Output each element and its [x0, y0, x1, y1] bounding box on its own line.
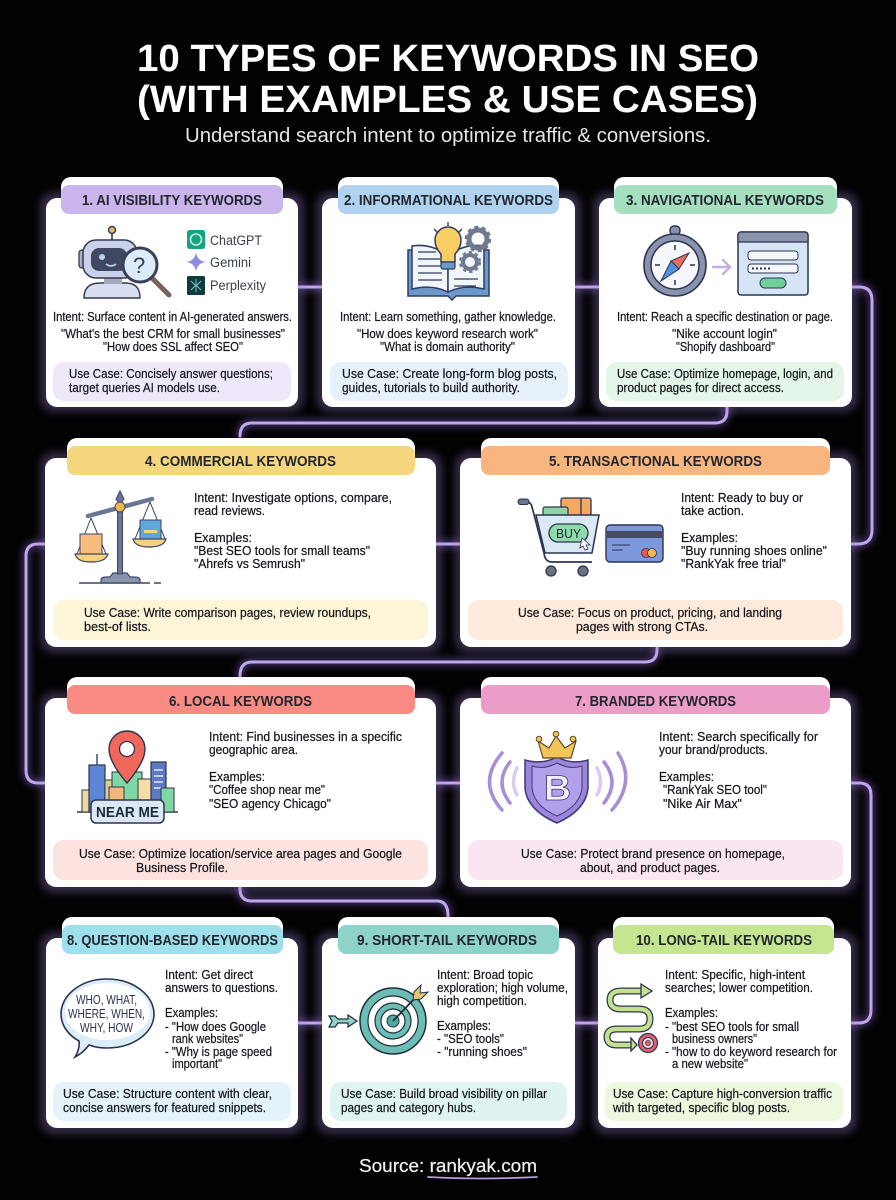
panel: 2. informational keywords	[316, 177, 581, 412]
use case: card 4	[53, 600, 428, 640]
heading: card 3	[614, 185, 837, 214]
use case: card 4: Use Case: Write comparison pages, review roundups,	[84, 606, 371, 620]
connectors between cards	[26, 287, 872, 1023]
icon: speech bubble: WHY, HOW	[80, 1021, 133, 1035]
intent and examples: card 3	[617, 310, 833, 354]
use case: card 2: Use Case: Create long-form blog posts,	[342, 367, 557, 381]
use case: card 1: Use Case: Concisely answer questions;	[69, 367, 273, 381]
panel: 9. short-tail keywords	[316, 917, 581, 1134]
intent and examples: card 2	[340, 310, 556, 354]
intent and examples: card 10	[665, 968, 837, 1071]
icon: Gemini logo	[186, 252, 206, 272]
panel: 6. local keywords	[40, 677, 442, 893]
panel: 5. transactional keywords	[455, 438, 857, 653]
intent and examples: card 3: "Nike account login"	[672, 327, 777, 341]
intent and examples: card 10: a new website"	[672, 1057, 748, 1071]
intent and examples: card 1: "What's the best CRM for small businesses"	[61, 327, 285, 341]
panel: 4. commercial keywords	[40, 438, 442, 653]
heading: card 1: 1. AI VISIBILITY KEYWORDS	[82, 193, 262, 209]
heading: card 8: 8. QUESTION-BASED KEYWORDS	[67, 933, 278, 949]
intent and examples: card 8: important"	[172, 1057, 222, 1071]
intent and examples: card 1: Intent: Surface content in AI-generated answers.	[53, 310, 292, 324]
intent and examples: card 5: "RankYak free trial"	[681, 557, 786, 571]
intent and examples: card 4: "Ahrefs vs Semrush"	[194, 557, 305, 571]
intent and examples: card 4: Intent: Investigate options, compare,	[194, 491, 392, 505]
icon: shopping cart with BUY button	[518, 498, 599, 576]
heading: card 6	[67, 685, 415, 714]
intent and examples: card 8	[165, 968, 278, 1071]
use case: card 10	[605, 1082, 843, 1121]
icon: city with map pin and NEAR ME label	[77, 731, 178, 823]
intent and examples: card 4: read reviews.	[194, 504, 265, 518]
intent and examples: card 9: high competition.	[437, 994, 527, 1008]
intent and examples: card 7: Intent: Search specifically for	[659, 730, 818, 744]
heading: card 5	[481, 446, 830, 475]
icon: Perplexity logo	[187, 276, 205, 295]
heading: card 6: 6. LOCAL KEYWORDS	[169, 694, 312, 710]
use case: card 5: Use Case: Focus on product, pricing, and landing	[518, 606, 782, 620]
icon: compass	[644, 226, 706, 296]
intent and examples: card 7: "Nike Air Max"	[663, 797, 742, 811]
icon: ChatGPT logo	[187, 230, 205, 249]
intent and examples: card 5	[681, 491, 827, 571]
intent and examples: card 5: take action.	[681, 504, 744, 518]
AI tool labels: ChatGPT	[210, 233, 262, 248]
heading: card 10	[613, 925, 834, 954]
intent and examples: card 9	[437, 968, 568, 1059]
use case: card 3: product pages for direct access.	[617, 381, 784, 395]
use case: card 8: Use Case: Structure content with clear,	[63, 1087, 272, 1101]
intent and examples: card 6: geographic area.	[209, 743, 298, 757]
use case: card 7: Use Case: Protect brand presence on homepage,	[521, 847, 785, 861]
intent and examples: card 6	[209, 730, 402, 811]
AI tool labels: Perplexity	[210, 278, 266, 293]
icon: balance scale	[75, 491, 166, 583]
intent and examples: card 10: Intent: Specific, high-intent	[665, 968, 805, 982]
icon: shield with crown and signal waves	[490, 731, 626, 823]
intent and examples: card 7: "RankYak SEO tool"	[663, 783, 767, 797]
intent and examples: card 7	[659, 730, 818, 811]
heading: card 3: 3. NAVIGATIONAL KEYWORDS	[626, 193, 824, 209]
panel: 3. navigational keywords	[593, 177, 858, 412]
intent and examples: card 8: Examples:	[165, 1006, 218, 1020]
use case: card 8	[53, 1082, 291, 1121]
panel: 1. AI visibility keywords	[40, 177, 304, 412]
use case: card 9: Use Case: Build broad visibility on pillar	[341, 1087, 547, 1101]
title: (WITH EXAMPLES & USE CASES)	[137, 79, 758, 121]
use case: card 5	[468, 600, 843, 640]
subtitle: Understand search intent to optimize traffic & conversions.	[185, 125, 711, 147]
icon: city with map pin and NEAR ME label: NEAR ME	[96, 804, 159, 821]
intent and examples: card 1	[53, 310, 292, 354]
heading: card 8	[62, 925, 283, 954]
intent and examples: card 10: - "how to do keyword research for	[665, 1045, 837, 1059]
intent and examples: card 6: Intent: Find businesses in a specific	[209, 730, 402, 744]
use case: card 10: Use Case: Capture high-conversion traffic	[613, 1087, 832, 1101]
intent and examples: card 10: business owners"	[672, 1032, 757, 1046]
intent and examples: card 10: Examples:	[665, 1006, 718, 1020]
icon: shopping cart with BUY button: BUY	[556, 527, 582, 541]
intent and examples: card 8: rank websites"	[172, 1032, 243, 1046]
icon: login window	[738, 232, 808, 295]
icon: speech bubble: WHO, WHAT,	[76, 993, 137, 1007]
intent and examples: card 7: Examples:	[659, 770, 714, 784]
heading: card 1	[61, 185, 283, 214]
heading: card 5: 5. TRANSACTIONAL KEYWORDS	[549, 454, 762, 470]
icon: open book with bulb and gears	[408, 222, 490, 300]
icon: winding arrow to target	[607, 984, 658, 1052]
intent and examples: card 4: "Best SEO tools for small teams"	[194, 544, 370, 558]
intent and examples: card 9: - "SEO tools"	[437, 1032, 504, 1046]
heading: card 9: 9. SHORT-TAIL KEYWORDS	[357, 933, 537, 949]
icon: shield with crown and signal waves: B	[544, 769, 571, 808]
source footer: Source: rankyak.com	[359, 1156, 537, 1176]
icon: robot with magnifier: ?	[133, 253, 145, 278]
arrow: compass to login page	[713, 260, 730, 274]
intent and examples: card 9: exploration; high volume,	[437, 981, 568, 995]
icon: credit card	[606, 525, 663, 562]
intent and examples: card 2: "What is domain authority"	[380, 340, 515, 354]
intent and examples: card 2: Intent: Learn something, gather knowledge.	[340, 310, 556, 324]
heading: card 7: 7. BRANDED KEYWORDS	[575, 694, 736, 710]
intent and examples: card 3: Intent: Reach a specific destination or page.	[617, 310, 833, 324]
heading: card 2	[338, 185, 559, 214]
icon: target with arrows	[329, 985, 428, 1054]
intent and examples: card 10: - "best SEO tools for small	[665, 1020, 799, 1034]
use case: card 6	[53, 840, 428, 880]
use case: card 2: guides, tutorials to build authority.	[342, 381, 520, 395]
intent and examples: card 4: Examples:	[194, 531, 252, 545]
intent and examples: card 6: Examples:	[209, 770, 265, 784]
icon: speech bubble: WHERE, WHEN,	[68, 1007, 145, 1021]
intent and examples: card 7: your brand/products.	[659, 743, 768, 757]
AI tool labels: Gemini	[210, 255, 251, 270]
intent and examples: card 6: "Coffee shop near me"	[209, 783, 325, 797]
use case: card 5: pages with strong CTAs.	[576, 620, 708, 634]
heading: card 4: 4. COMMERCIAL KEYWORDS	[145, 454, 336, 470]
use case: card 4: best-of lists.	[84, 620, 151, 634]
use case: card 6: Business Profile.	[136, 861, 228, 875]
intent and examples: card 9: Intent: Broad topic	[437, 968, 533, 982]
AI tool labels	[210, 233, 266, 293]
heading: card 7	[481, 685, 830, 714]
panel: 7. branded keywords	[455, 677, 857, 893]
icon: robot with magnifier	[79, 226, 169, 298]
intent and examples: card 6: "SEO agency Chicago"	[209, 797, 331, 811]
intent and examples: card 3: "Shopify dashboard"	[676, 340, 775, 354]
title	[137, 38, 759, 121]
intent and examples: card 5: Intent: Ready to buy or	[681, 491, 803, 505]
use case: card 1	[53, 362, 291, 401]
heading: card 9	[338, 925, 559, 954]
intent and examples: card 9: - "running shoes"	[437, 1045, 527, 1059]
intent and examples: card 1: "How does SSL affect SEO"	[103, 340, 243, 354]
intent and examples: card 4	[194, 491, 392, 571]
intent and examples: card 5: Examples:	[681, 531, 738, 545]
intent and examples: card 2: "How does keyword research work"	[357, 327, 538, 341]
icon: speech bubble	[61, 979, 154, 1057]
use case: card 9: pages and category hubs.	[341, 1101, 476, 1115]
title: 10 TYPES OF KEYWORDS IN SEO	[137, 38, 759, 80]
use case: card 3	[606, 362, 844, 401]
intent and examples: card 9: Examples:	[437, 1019, 491, 1033]
use case: card 7: about, and product pages.	[580, 861, 720, 875]
heading: card 10: 10. LONG-TAIL KEYWORDS	[636, 933, 812, 949]
use case: card 8: concise answers for featured snippets.	[63, 1101, 266, 1115]
intent and examples: card 8: Intent: Get direct	[165, 968, 253, 982]
panel: 8. question-based keywords	[40, 917, 304, 1134]
intent and examples: card 10: searches; lower competition.	[665, 981, 813, 995]
intent and examples: card 5: "Buy running shoes online"	[681, 544, 827, 558]
use case: card 2	[330, 362, 568, 401]
heading: card 4	[67, 446, 415, 475]
use case: card 3: Use Case: Optimize homepage, login, and	[617, 367, 833, 381]
intent and examples: card 8: - "Why is page speed	[165, 1045, 272, 1059]
panel: 10. long-tail keywords	[593, 917, 857, 1134]
heading: card 2: 2. INFORMATIONAL KEYWORDS	[344, 193, 553, 209]
use case: card 7	[468, 840, 843, 880]
use case: card 1: target queries AI models use.	[69, 381, 220, 395]
intent and examples: card 8: answers to questions.	[165, 981, 278, 995]
use case: card 6: Use Case: Optimize location/service area pages and Google	[79, 847, 402, 861]
intent and examples: card 8: - "How does Google	[165, 1020, 266, 1034]
use case: card 10: with targeted, specific blog posts.	[612, 1101, 790, 1115]
use case: card 9	[330, 1082, 567, 1121]
